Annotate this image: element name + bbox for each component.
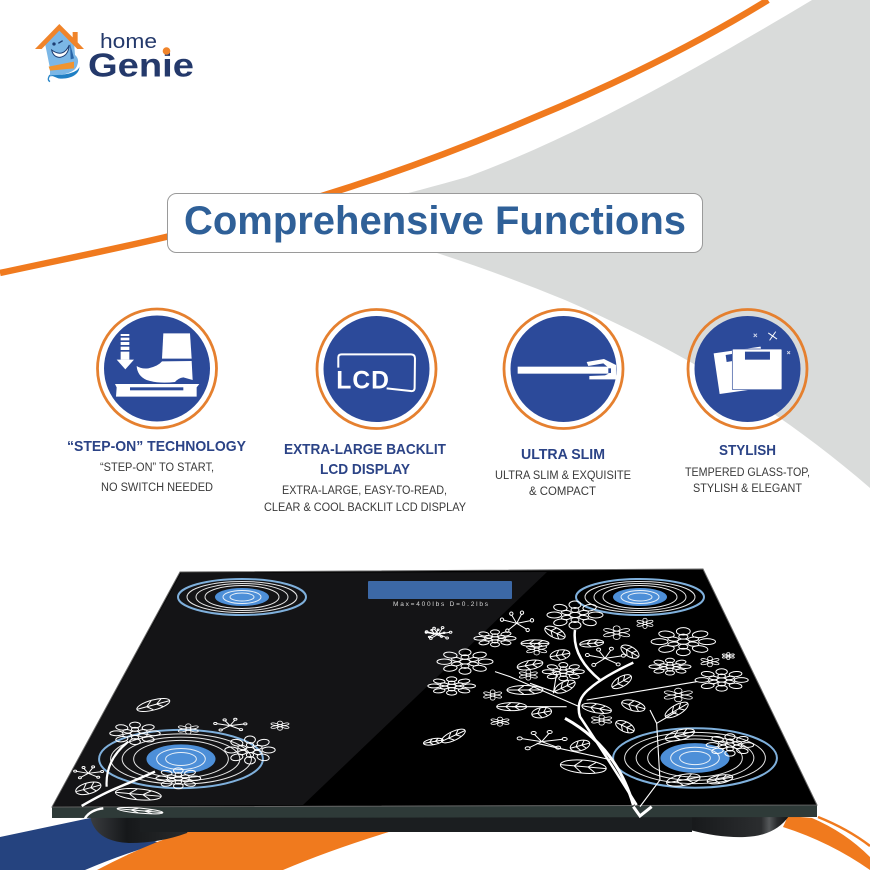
glass top bbox=[52, 569, 817, 807]
description: ULTRA SLIM & EXQUISITE bbox=[495, 470, 631, 482]
product: bathroom scale bbox=[52, 569, 817, 843]
icon: LCD panel: LCD bbox=[336, 368, 389, 395]
icon: thin scale between fingers bbox=[504, 310, 623, 428]
left foot bbox=[90, 816, 195, 843]
gloss reflection bbox=[53, 572, 547, 806]
background: bottom-right orange stripes bbox=[783, 816, 870, 870]
icon: LCD panel bbox=[317, 310, 436, 428]
title banner: Comprehensive Functions bbox=[184, 199, 686, 243]
LCD window bbox=[368, 581, 512, 599]
floral pattern: lower-left cluster bbox=[74, 629, 445, 818]
description: CLEAR & COOL BACKLIT LCD DISPLAY bbox=[264, 502, 466, 514]
background: bottom-left navy stripe bbox=[0, 818, 160, 870]
icon: genie house mascot bbox=[35, 24, 84, 82]
description bbox=[100, 462, 214, 494]
heading: LCD DISPLAY bbox=[320, 461, 410, 478]
icon: foot on scale bbox=[98, 309, 216, 428]
description: TEMPERED GLASS-TOP, bbox=[685, 467, 810, 479]
sensor pad: top right bbox=[576, 579, 704, 615]
description: EXTRA-LARGE, EASY-TO-READ, bbox=[282, 485, 447, 497]
feature: ultra slim bbox=[495, 310, 631, 498]
description bbox=[264, 485, 466, 514]
description: STYLISH & ELEGANT bbox=[693, 483, 802, 495]
feature: extra-large backlit LCD display bbox=[264, 310, 466, 514]
right foot bbox=[690, 816, 789, 837]
LCD spec text: Max=400lbs D=0.2lbs bbox=[393, 601, 489, 608]
heading: STYLISH bbox=[719, 442, 776, 459]
description bbox=[685, 467, 810, 495]
description bbox=[495, 470, 631, 498]
background: orange swoosh bbox=[0, 0, 768, 273]
sensor pad: top left bbox=[178, 579, 306, 615]
logo wordmark: home bbox=[100, 30, 157, 53]
heading bbox=[284, 441, 446, 478]
description: “STEP-ON” TO START, bbox=[100, 462, 214, 474]
logo wordmark: Genie bbox=[88, 48, 194, 84]
glass edge bbox=[52, 805, 817, 818]
sensor pad: bottom right bbox=[613, 728, 777, 788]
feature: step-on technology bbox=[67, 309, 246, 494]
heading: EXTRA-LARGE BACKLIT bbox=[284, 441, 446, 458]
background: bottom orange stripe bbox=[97, 831, 392, 870]
heading: “STEP-ON” TECHNOLOGY bbox=[67, 438, 246, 455]
title banner bbox=[168, 194, 702, 252]
floral pattern: right tree bbox=[423, 601, 754, 816]
description: & COMPACT bbox=[529, 486, 596, 498]
icon: two glass scales with sparkles bbox=[688, 310, 807, 428]
sensor pad: bottom left bbox=[99, 730, 263, 788]
logo wordmark bbox=[88, 30, 194, 84]
scale base bbox=[140, 816, 692, 832]
heading: ULTRA SLIM bbox=[521, 446, 605, 463]
background: grey swoosh bbox=[310, 0, 870, 488]
logo: home Genie bbox=[35, 24, 194, 84]
description: NO SWITCH NEEDED bbox=[101, 482, 213, 494]
feature: stylish bbox=[685, 310, 810, 495]
